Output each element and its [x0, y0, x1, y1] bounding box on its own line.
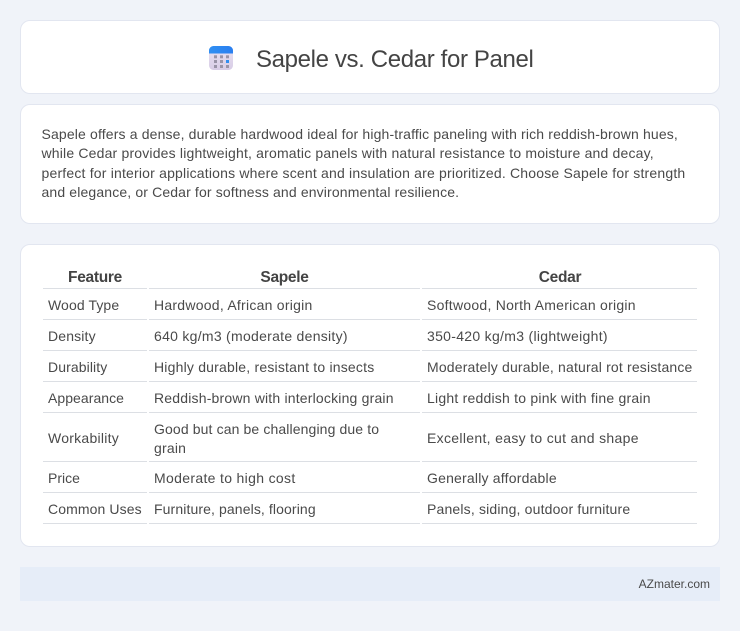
row: wood type — [48, 297, 636, 313]
row: workability: Good but can be challenging due to — [154, 421, 379, 437]
row: density — [48, 328, 608, 344]
row: workability: grain — [154, 440, 186, 456]
row: wood type: Wood Type — [48, 297, 119, 313]
row: price: Price — [48, 470, 80, 486]
row: wood type: Hardwood, African origin — [154, 297, 313, 313]
summary text: perfect for interior applications where scent and insulation are prioritized. Choose Sapele for strength — [42, 165, 685, 181]
row: wood type: Softwood, North American origin — [427, 297, 636, 313]
table header: Cedar — [539, 269, 581, 286]
row: appearance: Appearance — [48, 390, 124, 406]
row: price: Moderate to high cost — [154, 470, 296, 486]
row: appearance: Reddish-brown with interlocking grain — [154, 390, 394, 406]
row: workability: Workability — [48, 430, 119, 446]
row: common uses: Panels, siding, outdoor furniture — [427, 501, 630, 517]
row: appearance — [48, 390, 651, 406]
comparison table card — [20, 244, 720, 547]
table header: Feature — [68, 269, 122, 286]
row: durability — [48, 359, 692, 375]
row: common uses: Furniture, panels, flooring — [154, 501, 316, 517]
icon: calendar — [209, 46, 233, 70]
row: common uses: Common Uses — [48, 501, 142, 517]
table header: Sapele — [260, 269, 309, 286]
summary text: Sapele offers a dense, durable hardwood ideal for high-traffic paneling with rich reddish-brown hues, — [42, 126, 678, 142]
row: durability: Moderately durable, natural rot resistance — [427, 359, 692, 375]
row: workability — [48, 421, 639, 456]
row: price — [48, 470, 557, 486]
row: durability: Highly durable, resistant to insects — [154, 359, 374, 375]
title: Sapele vs. Cedar for Panel — [256, 46, 533, 73]
summary card — [20, 104, 720, 224]
table header — [68, 269, 582, 286]
summary text: and elegance, or Cedar for softness and environmental resilience. — [42, 184, 459, 200]
summary text: while Cedar provides lightweight, aromatic panels with natural resistance to moisture and decay, — [42, 145, 654, 161]
footer bar — [20, 567, 720, 601]
title card — [20, 20, 720, 94]
row: density: 640 kg/m3 (moderate density) — [154, 328, 348, 344]
row: common uses — [48, 501, 630, 517]
row: workability: Excellent, easy to cut and shape — [427, 430, 639, 446]
row: price: Generally affordable — [427, 470, 557, 486]
row: appearance: Light reddish to pink with fine grain — [427, 390, 651, 406]
summary text — [42, 126, 685, 200]
row: density: 350-420 kg/m3 (lightweight) — [427, 328, 608, 344]
footer credit: AZmater.com — [639, 577, 710, 591]
row: durability: Durability — [48, 359, 107, 375]
row: density: Density — [48, 328, 96, 344]
